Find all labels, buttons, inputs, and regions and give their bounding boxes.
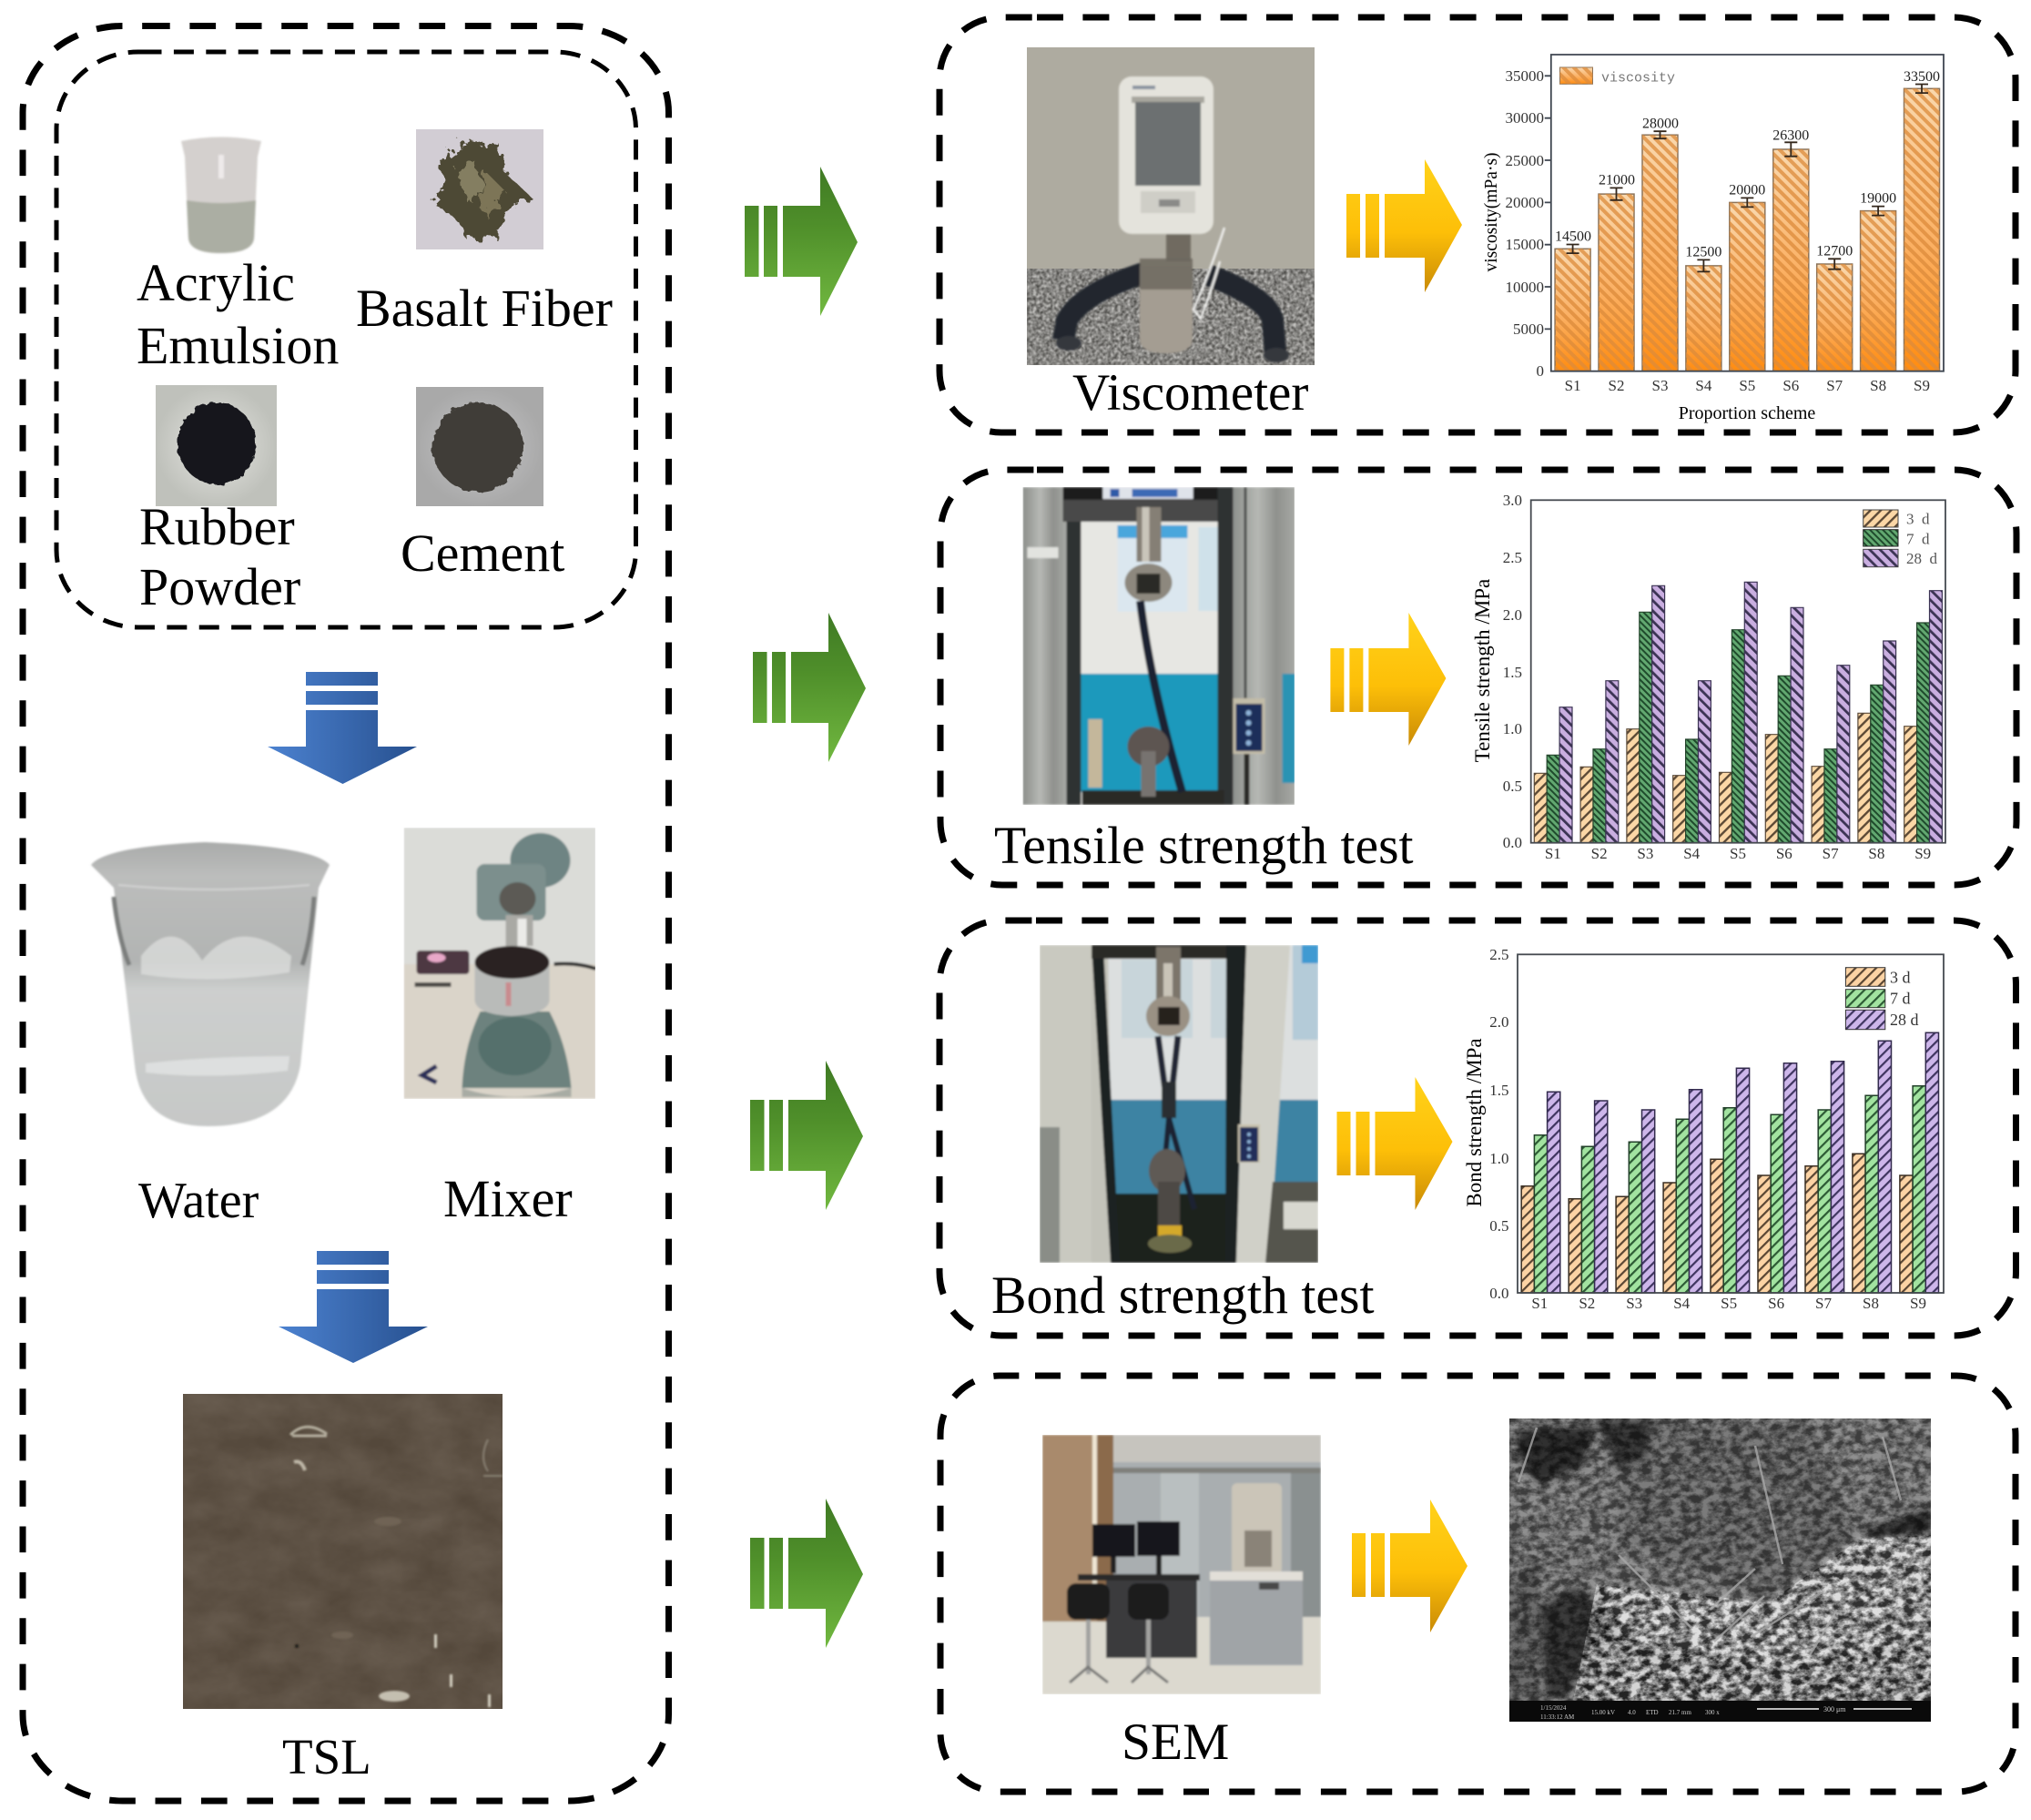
legend: curing ages: 28 d: [1890, 1011, 1919, 1029]
x-axis tick labels: S8: [1863, 1295, 1879, 1312]
y-axis tick labels: 2.0: [1489, 1013, 1509, 1031]
arrow: materials to mixing: [268, 672, 417, 784]
label: Rubber Powder: Rubber: [139, 497, 295, 556]
x-axis tick labels: S7: [1826, 377, 1843, 394]
legend: curing ages: [1863, 510, 1937, 567]
x-axis tick labels: S3: [1637, 845, 1653, 862]
arrow: to SEM: [750, 1499, 863, 1648]
x-axis tick labels: S8: [1870, 377, 1886, 394]
series: 3 d bars: [1534, 713, 1917, 843]
y-axis tick labels: 0.5: [1503, 778, 1522, 795]
series: 28 d bars: [1548, 1032, 1939, 1293]
y-axis tick labels: 0.5: [1489, 1217, 1509, 1235]
panel: bond strength test: [939, 920, 2016, 1336]
x-axis tick labels: S9: [1914, 845, 1931, 862]
dashed frame: [939, 920, 2016, 1336]
y-axis tick labels: 0: [1537, 362, 1544, 380]
series: 7 d bars: [1547, 612, 1930, 843]
image: SEM micrograph: 21.7 mm: [1669, 1709, 1691, 1716]
legend: curing ages: 3 d: [1890, 968, 1910, 986]
legend: viscosity: [1560, 67, 1675, 86]
arrow: mixing to TSL: [279, 1251, 428, 1363]
photo: acrylic emulsion beaker: [181, 137, 261, 253]
image: SEM micrograph: 4.0: [1628, 1709, 1636, 1716]
y-axis tick labels: 10000: [1506, 279, 1544, 296]
x-axis tick labels: S4: [1695, 377, 1712, 394]
photo: cement: [416, 387, 543, 506]
photo: TSL coating sample: [183, 1394, 503, 1709]
y-axis tick labels: [1503, 492, 1522, 851]
x-axis tick labels: S5: [1721, 1295, 1737, 1312]
panel: SEM: [940, 1376, 2016, 1792]
x-axis tick labels: S3: [1652, 377, 1668, 394]
x-axis tick labels: S8: [1868, 845, 1884, 862]
y-axis tick labels: 1.5: [1489, 1082, 1509, 1099]
x-axis tick labels: S9: [1910, 1295, 1926, 1312]
photo: scanning electron microscope room: [1042, 1435, 1321, 1694]
value labels: 28000: [1642, 116, 1679, 131]
photo: viscometer: [1027, 47, 1315, 365]
photo: mixer: [404, 828, 595, 1099]
arrow: to viscosity test: [745, 167, 858, 316]
value labels: 26300: [1772, 127, 1809, 143]
photo: rubber powder: [156, 385, 277, 506]
panel: materials and mixing process: [23, 25, 668, 1801]
inner dashed frame: raw materials: [56, 52, 635, 627]
legend: curing ages: 7 d: [1890, 990, 1910, 1008]
dashed frame: [940, 1376, 2016, 1792]
axis frame and ticks: [1545, 55, 1944, 371]
image: SEM micrograph: ETD: [1646, 1709, 1659, 1716]
x-axis tick labels: S7: [1823, 845, 1839, 862]
image: SEM micrograph: 300 x: [1705, 1709, 1720, 1716]
label: Viscometer: Viscometer: [1072, 364, 1308, 422]
axis titles: Proportion scheme: [1679, 403, 1815, 423]
label: Acrylic Emulsion: Emulsion: [137, 316, 339, 375]
x-axis tick labels: S3: [1626, 1295, 1642, 1312]
x-axis tick labels: S5: [1730, 845, 1746, 862]
legend: curing ages: 7 d: [1906, 531, 1930, 548]
arrow: to bond test: [750, 1061, 863, 1210]
chart: viscosity bar chart: [1482, 55, 1944, 423]
panel: tensile strength test: [940, 470, 2016, 885]
legend: curing ages: 28 d: [1906, 550, 1937, 567]
y-axis tick labels: 2.0: [1503, 606, 1522, 624]
value labels: 14500: [1555, 229, 1591, 244]
legend: curing ages: [1845, 968, 1919, 1030]
label: Tensile strength test: Tensile strength test: [994, 818, 1414, 875]
photo: water beaker: [91, 842, 330, 1126]
y-axis tick labels: 3.0: [1503, 492, 1522, 509]
value labels: 12700: [1816, 244, 1853, 259]
x-axis tick labels: S9: [1914, 377, 1930, 394]
series: 28 d bars: [1559, 582, 1942, 843]
x-axis tick labels: S6: [1776, 845, 1792, 862]
x-axis tick labels: S1: [1565, 377, 1581, 394]
image: SEM micrograph: 11:33:12 AM: [1540, 1713, 1575, 1721]
value labels: 19000: [1860, 191, 1896, 207]
x-axis tick labels: S6: [1782, 377, 1799, 394]
image: SEM micrograph: 15.00 kV: [1591, 1709, 1615, 1716]
x-axis tick labels: S1: [1531, 1295, 1548, 1312]
label: SEM: SEM: [1122, 1713, 1229, 1771]
bar hatching: [1555, 88, 1939, 371]
chart: bond strength bar chart: [1463, 946, 1944, 1312]
image: SEM micrograph: [1509, 1418, 1931, 1722]
photo: basalt fiber: [416, 129, 543, 249]
x-axis tick labels: S2: [1591, 845, 1608, 862]
panel: viscosity test: [939, 17, 2016, 432]
value labels: 21000: [1599, 173, 1635, 188]
label: Basalt Fiber: Basalt Fiber: [356, 279, 613, 338]
value labels: [1555, 69, 1940, 260]
value labels: 12500: [1685, 245, 1721, 260]
y-axis tick labels: 5000: [1513, 320, 1544, 338]
x-axis tick labels: [1565, 377, 1930, 394]
series: 3 d bars: [1521, 1154, 1913, 1293]
arrow: SEM to micrograph: [1352, 1500, 1467, 1632]
y-axis tick labels: 2.5: [1489, 946, 1509, 963]
y-axis tick labels: [1489, 946, 1509, 1302]
y-axis tick labels: 0.0: [1503, 834, 1522, 851]
arrow: to tensile test: [753, 613, 866, 762]
x-axis tick labels: [1531, 1295, 1926, 1312]
label: Bond strength test: Bond strength test: [991, 1266, 1375, 1325]
x-axis tick labels: S7: [1815, 1295, 1832, 1312]
x-axis tick labels: S2: [1609, 377, 1624, 394]
axis titles: viscosity(mPa·s): [1482, 152, 1501, 272]
dashed frame: [940, 470, 2016, 885]
y-axis tick labels: 1.0: [1489, 1150, 1509, 1167]
x-axis tick labels: S6: [1768, 1295, 1784, 1312]
image: SEM micrograph: 1/15/2024: [1540, 1704, 1567, 1712]
viscosity bars: [1555, 88, 1939, 371]
x-axis tick labels: S4: [1673, 1295, 1691, 1312]
legend: viscosity: viscosity: [1601, 70, 1675, 86]
photo: tensile testing machine: [1023, 487, 1295, 805]
label: Mixer: Mixer: [443, 1169, 573, 1228]
y-axis title: Bond strength /MPa: [1463, 1038, 1486, 1207]
y-axis tick labels: 15000: [1506, 236, 1544, 253]
value labels: 20000: [1729, 182, 1765, 198]
y-axis tick labels: 35000: [1506, 67, 1544, 85]
axis frame: [1518, 954, 1944, 1293]
y-axis tick labels: 30000: [1506, 109, 1544, 127]
y-axis tick labels: 25000: [1506, 152, 1544, 169]
value labels: 33500: [1904, 69, 1940, 85]
x-axis tick labels: S1: [1545, 845, 1561, 862]
arrow: bond machine to chart: [1336, 1077, 1453, 1210]
label: Rubber Powder: Powder: [139, 557, 300, 616]
dashed frame: [939, 17, 2016, 432]
x-axis tick labels: S4: [1683, 845, 1701, 862]
label: TSL: TSL: [282, 1729, 371, 1784]
axis titles: [1482, 152, 1815, 423]
error bars: [1567, 84, 1928, 271]
y-axis tick labels: 0.0: [1489, 1285, 1509, 1302]
label: Acrylic Emulsion: Acrylic: [137, 253, 295, 312]
x-axis tick labels: S5: [1739, 377, 1755, 394]
outer dashed frame: [23, 25, 668, 1801]
y-axis tick labels: 1.5: [1503, 664, 1522, 681]
series: 7 d bars: [1534, 1086, 1925, 1293]
image: SEM micrograph: 300 μm: [1823, 1705, 1846, 1713]
y-axis title: Tensile strength /MPa: [1471, 579, 1494, 762]
y-axis tick labels: 20000: [1506, 194, 1544, 211]
label: Water: Water: [138, 1173, 259, 1229]
photo: bond testing machine: [1040, 945, 1318, 1263]
y-axis tick labels: 1.0: [1503, 720, 1522, 737]
y-axis tick labels: [1506, 67, 1544, 380]
chart: tensile strength bar chart: [1471, 492, 1945, 862]
y-axis tick labels: 2.5: [1503, 549, 1522, 566]
axis frame: [1531, 500, 1945, 843]
x-axis tick labels: S2: [1579, 1295, 1595, 1312]
arrow: tensile machine to chart: [1330, 613, 1446, 746]
label: Cement: Cement: [401, 524, 564, 583]
x-axis tick labels: [1545, 845, 1931, 862]
arrow: viscometer to chart: [1346, 159, 1462, 292]
legend: curing ages: 3 d: [1906, 511, 1930, 528]
